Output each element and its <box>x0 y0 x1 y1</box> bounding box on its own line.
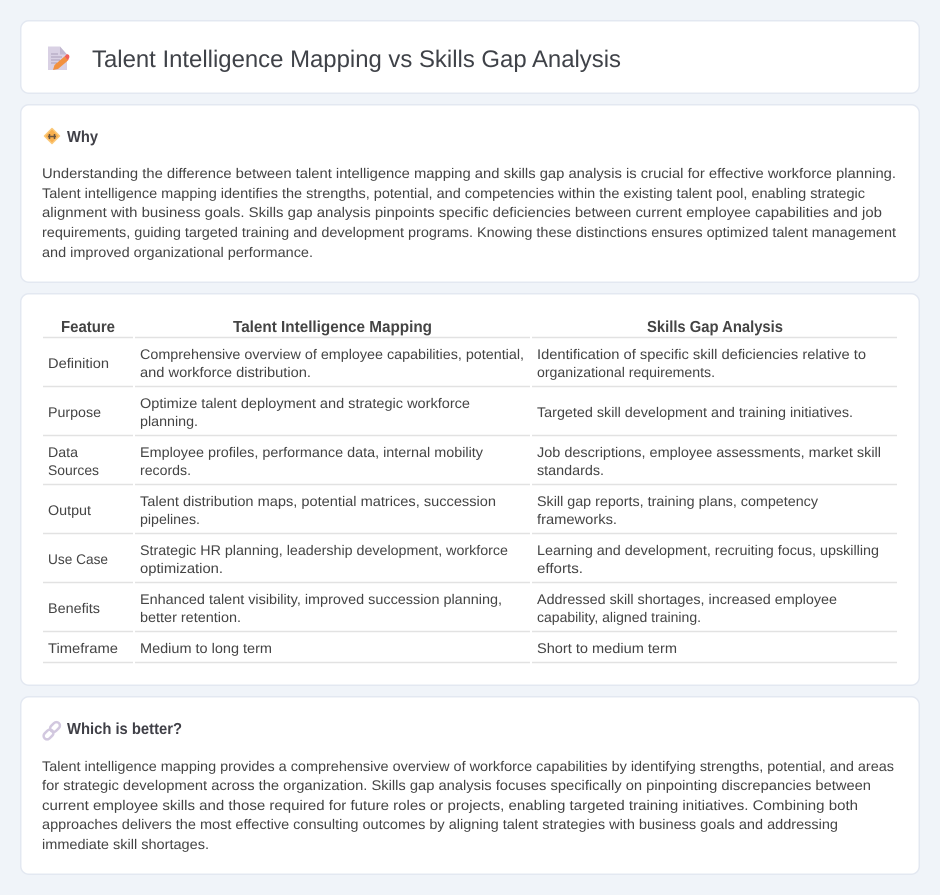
row: use case: efforts. <box>537 560 583 576</box>
text block: why paragraph: Understanding the difference between talent intelligence mapping and skills gap analysis is crucial for effective workforce planning. <box>42 165 896 181</box>
text block: why paragraph <box>42 165 896 260</box>
table header: Talent Intelligence Mapping <box>233 319 432 336</box>
table header: Feature <box>61 319 115 336</box>
text block: why paragraph: and improved organizational performance. <box>42 244 313 260</box>
row: definition: Definition <box>48 355 109 371</box>
panel: title card <box>21 21 919 93</box>
row: use case: optimization. <box>140 560 223 576</box>
text block: which is better paragraph: for strategic development across the organization. Skills gap analysis focuses specifically on pinpointing discrepancies between <box>42 777 871 793</box>
row: definition: organizational requirements. <box>537 364 715 380</box>
text block: which is better paragraph: approaches delivers the most effective consulting outcomes by aligning talent strategies with business goals and addressing <box>42 816 838 832</box>
text block: why paragraph: Talent intelligence mapping identifies the strengths, potential, and competencies within the existing talent pool, enabling strategic <box>42 185 865 201</box>
row: definition: Identification of specific skill deficiencies relative to <box>537 346 866 362</box>
row: benefits: Addressed skill shortages, increased employee <box>537 591 837 607</box>
row: definition: and workforce distribution. <box>140 364 311 380</box>
row: data sources: Data <box>48 444 78 460</box>
row: purpose <box>48 395 853 429</box>
table header: Skills Gap Analysis <box>647 319 783 336</box>
panel: comparison table <box>21 294 919 685</box>
row: output: pipelines. <box>140 511 200 527</box>
row: purpose: planning. <box>140 413 198 429</box>
row: output: Skill gap reports, training plans, competency <box>537 493 818 509</box>
icon: document with pencil <box>48 46 70 70</box>
row: data sources: Sources <box>48 462 99 478</box>
row: data sources: standards. <box>537 462 604 478</box>
panel: which is better <box>21 697 919 874</box>
row: benefits: capability, aligned training. <box>537 609 701 625</box>
row: data sources: Job descriptions, employee assessments, market skill <box>537 444 881 460</box>
row: output: Talent distribution maps, potential matrices, succession <box>140 493 496 509</box>
row: timeframe: Medium to long term <box>140 640 272 656</box>
row: data sources: Employee profiles, performance data, internal mobility <box>140 444 483 460</box>
heading: which is better: Which is better? <box>67 721 182 738</box>
heading: why: Why <box>67 129 98 146</box>
icon: chain link <box>42 721 61 741</box>
icon: diamond warning sign <box>44 128 60 144</box>
row: use case <box>48 542 879 576</box>
text block: which is better paragraph: current employee skills and those required for future roles or projects, enabling targeted training initiatives. Combining both <box>42 797 858 813</box>
row: purpose: Purpose <box>48 404 101 420</box>
table header <box>61 319 783 336</box>
row: output <box>48 493 818 527</box>
row: data sources: records. <box>140 462 191 478</box>
text block: why paragraph: requirements, guiding targeted training and development programs. Knowing these distinctions ensures optimized talent management <box>42 224 896 240</box>
row: output: Output <box>48 502 91 518</box>
text block: why paragraph: alignment with business goals. Skills gap analysis pinpoints specific deficiencies between current employee capabilities and job <box>42 204 882 220</box>
row: definition: Comprehensive overview of employee capabilities, potential, <box>140 346 524 362</box>
row: benefits <box>48 591 837 625</box>
panel: why <box>21 105 919 282</box>
row: use case: Strategic HR planning, leadership development, workforce <box>140 542 508 558</box>
row: use case: Use Case <box>48 551 108 567</box>
row: timeframe: Timeframe <box>48 640 118 656</box>
title: Talent Intelligence Mapping vs Skills Gap Analysis <box>92 46 621 73</box>
row: timeframe <box>48 640 677 656</box>
row: timeframe: Short to medium term <box>537 640 677 656</box>
row: use case: Learning and development, recruiting focus, upskilling <box>537 542 879 558</box>
row: purpose: Targeted skill development and training initiatives. <box>537 404 853 420</box>
row: output: frameworks. <box>537 511 617 527</box>
text block: which is better paragraph <box>42 758 894 852</box>
row: benefits: Enhanced talent visibility, improved succession planning, <box>140 591 502 607</box>
row: purpose: Optimize talent deployment and strategic workforce <box>140 395 470 411</box>
row: benefits: Benefits <box>48 600 100 616</box>
row: benefits: better retention. <box>140 609 241 625</box>
row: data sources <box>48 444 881 478</box>
text block: which is better paragraph: immediate skill shortages. <box>42 836 209 852</box>
row: definition <box>48 346 866 380</box>
text block: which is better paragraph: Talent intelligence mapping provides a comprehensive overview of workforce capabilities by identifying strengths, potential, and areas <box>42 758 894 774</box>
